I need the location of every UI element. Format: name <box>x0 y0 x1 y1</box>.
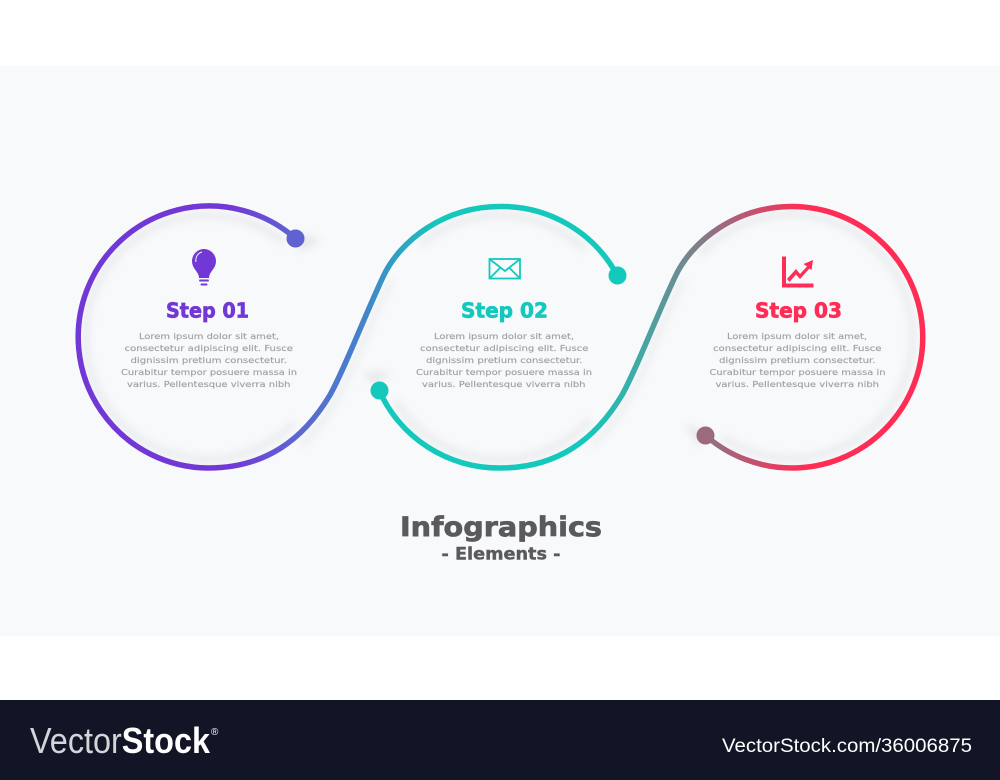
text block: step 01 <box>121 332 297 389</box>
text block: step 01: dignissim pretium consectetur. <box>130 356 287 365</box>
heading: step 02: Step 02 <box>461 298 548 322</box>
text block: step 02: consectetur adipiscing elit. Fusce <box>420 344 589 353</box>
line shadows <box>85 214 913 460</box>
dot: step 03 end <box>696 426 714 444</box>
footer registered mark: ® <box>211 727 219 738</box>
footer bar <box>0 700 1000 780</box>
panel: step 01 <box>121 249 297 389</box>
footer logo: VectorStock <box>30 720 211 761</box>
text block: step 02: varius. Pellentesque viverra nibh <box>422 380 586 389</box>
dot: step 02 end <box>608 266 626 284</box>
subtitle: - Elements - <box>442 544 560 564</box>
dot: step 02 start <box>370 382 388 400</box>
dot tail shadows <box>296 232 705 448</box>
text block: step 02 <box>416 332 592 389</box>
connector line: step 02 into step 03 <box>370 206 923 468</box>
dot: step 01 <box>286 230 304 248</box>
panel: step 02 <box>416 259 592 389</box>
title: Infographics <box>400 512 602 543</box>
panel: step 03 <box>710 256 886 389</box>
text block: step 03: dignissim pretium consectetur. <box>719 356 876 365</box>
connector line: step 01 into step 02 <box>78 206 617 468</box>
text block: step 01: Lorem ipsum dolor sit amet, <box>139 332 279 341</box>
text block: step 01: consectetur adipiscing elit. Fusce <box>124 344 293 353</box>
text block: step 03 <box>710 332 886 389</box>
footer url: VectorStock.com/36006875 <box>722 736 972 757</box>
heading: step 01: Step 01 <box>166 298 249 322</box>
icon: growth chart <box>782 256 814 288</box>
text block: step 01: varius. Pellentesque viverra nibh <box>127 380 290 389</box>
text block: step 03: consectetur adipiscing elit. Fusce <box>713 344 882 353</box>
text block: step 03: Lorem ipsum dolor sit amet, <box>727 332 867 341</box>
heading: step 03: Step 03 <box>755 298 842 322</box>
text block: step 03: Curabitur tempor posuere massa in <box>710 368 886 377</box>
text block: step 03: varius. Pellentesque viverra nibh <box>716 380 879 389</box>
text block: step 02: Lorem ipsum dolor sit amet, <box>434 332 574 341</box>
text block: step 02: dignissim pretium consectetur. <box>426 356 582 365</box>
background panel <box>0 66 1000 636</box>
icon: light bulb <box>192 249 216 286</box>
icon: envelope <box>490 259 520 278</box>
text block: step 01: Curabitur tempor posuere massa in <box>121 368 297 377</box>
text block: step 02: Curabitur tempor posuere massa in <box>416 368 592 377</box>
